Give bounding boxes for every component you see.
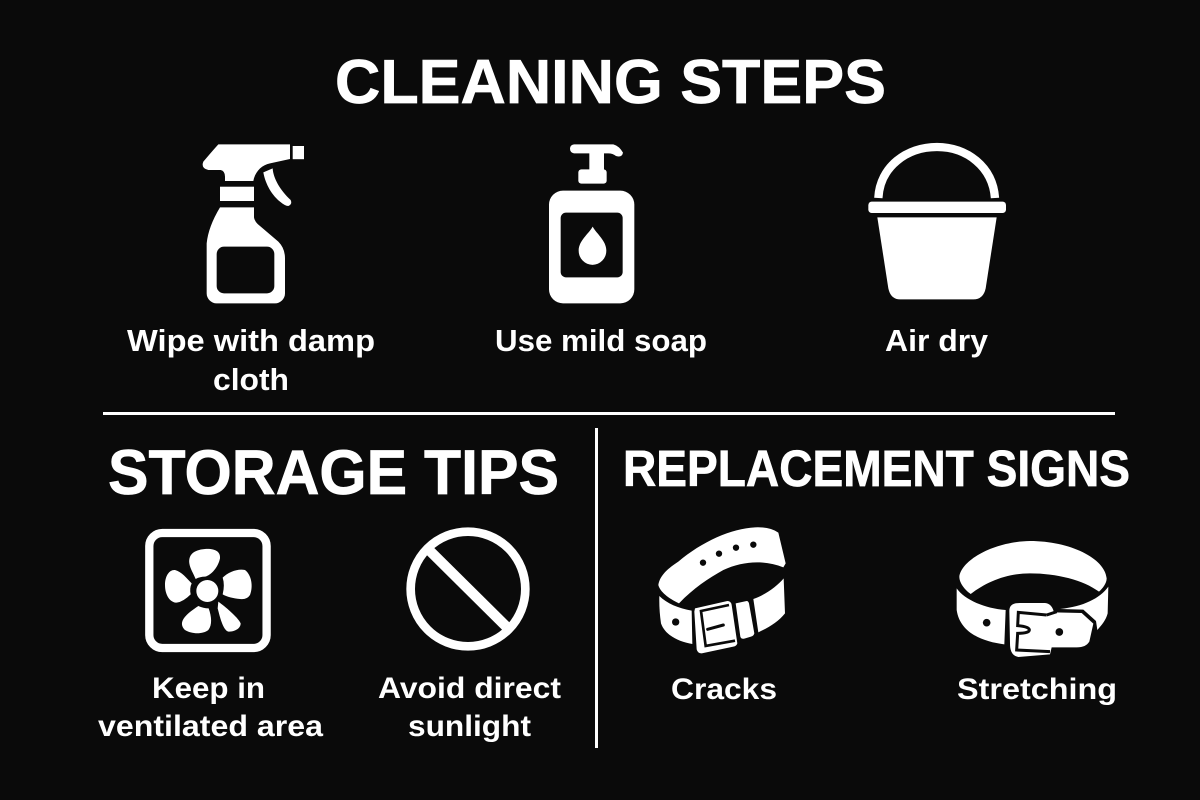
icon: stretched belt bbox=[957, 541, 1108, 657]
trigger bbox=[263, 168, 291, 206]
label: stretching: Stretching bbox=[957, 673, 1117, 706]
icon: spray bottle bbox=[203, 144, 304, 303]
label: avoid direct sunlight: sunlight bbox=[408, 710, 531, 743]
label: keep in ventilated area bbox=[98, 672, 323, 743]
label: avoid direct sunlight bbox=[378, 672, 561, 743]
heading: storage tips: STORAGE TIPS bbox=[108, 438, 559, 508]
bottle collar bbox=[220, 187, 254, 201]
label: cracks: Cracks bbox=[671, 673, 777, 706]
heading: replacement signs: REPLACEMENT SIGNS bbox=[623, 440, 1130, 497]
label: wipe with damp cloth bbox=[127, 323, 375, 397]
nozzle tip bbox=[293, 146, 304, 159]
icon: no sunlight prohibition sign bbox=[411, 532, 525, 646]
label: wipe with damp cloth: Wipe with damp bbox=[127, 323, 375, 358]
spray head bbox=[203, 144, 290, 181]
label: use mild soap: Use mild soap bbox=[495, 323, 707, 358]
bottle body bbox=[207, 207, 285, 303]
label: keep in ventilated area: Keep in bbox=[152, 672, 265, 705]
icon: cracked belt bbox=[658, 527, 786, 653]
icon: bucket bbox=[868, 147, 1006, 299]
label: avoid direct sunlight: Avoid direct bbox=[378, 672, 561, 705]
icon: soap pump bottle bbox=[549, 144, 634, 303]
label: wipe with damp cloth: cloth bbox=[213, 362, 289, 397]
label: keep in ventilated area: ventilated area bbox=[98, 710, 323, 743]
icon: ventilation fan bbox=[149, 533, 267, 648]
title: cleaning steps: CLEANING STEPS bbox=[335, 48, 886, 117]
label: air dry: Air dry bbox=[885, 323, 989, 358]
